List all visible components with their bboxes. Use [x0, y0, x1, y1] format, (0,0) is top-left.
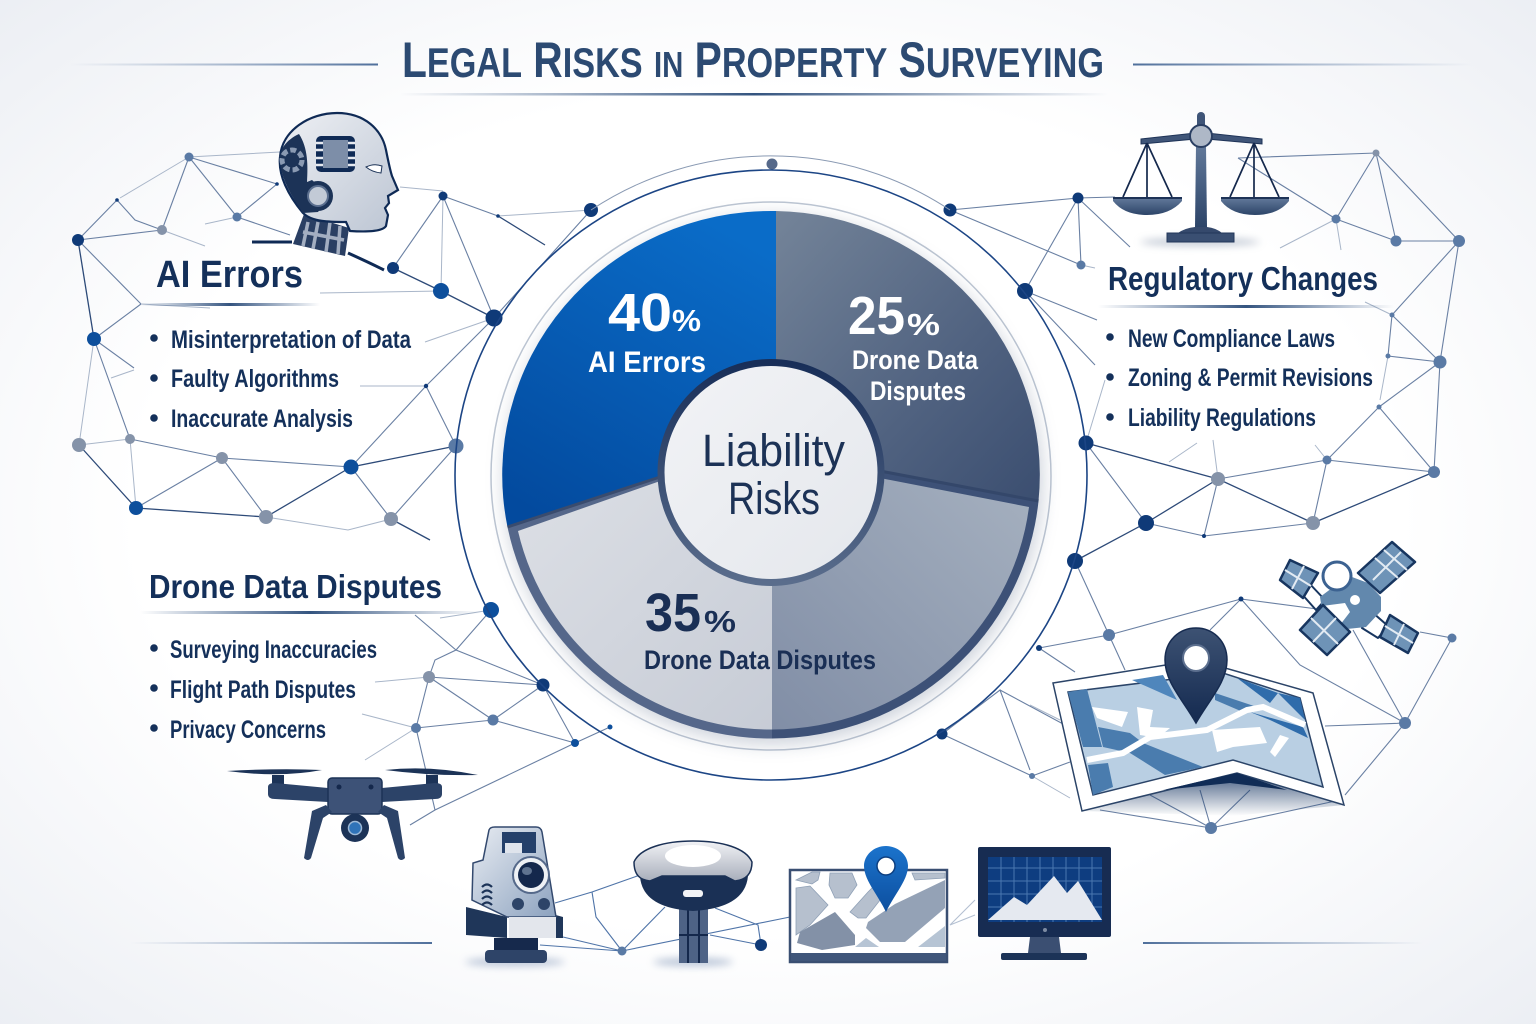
label: 25%: %	[907, 307, 940, 342]
hub label: Liability	[702, 425, 845, 476]
list: Zoning & Permit Revisions	[1128, 364, 1373, 392]
panel: regulatory changes	[1098, 260, 1394, 432]
label: 40%: AI Errors	[588, 346, 706, 379]
segment: 35% Drone Data Disputes, mid	[772, 472, 1038, 738]
network: left lower	[362, 610, 610, 825]
network: right lower	[942, 561, 1452, 828]
title: LEGAL RISKS IN PROPERTY SURVEYING	[402, 32, 1104, 88]
icon: drone	[227, 768, 478, 860]
icon: map tile with pin	[790, 846, 947, 962]
heading: Regulatory Changes	[1108, 260, 1378, 297]
icon: scales	[1113, 112, 1289, 246]
network nodes	[72, 150, 1465, 956]
list	[150, 326, 412, 433]
label: 25%: Disputes	[870, 376, 966, 406]
icon: folded map with pin	[1053, 628, 1344, 816]
label: 35%: Drone Data Disputes	[644, 645, 876, 675]
heading: AI Errors	[156, 254, 303, 296]
label: 35%	[644, 583, 876, 675]
list: Flight Path Disputes	[170, 676, 356, 704]
icon: total station	[465, 827, 565, 966]
heading: Drone Data Disputes	[149, 568, 442, 605]
label: 25%: 25	[848, 286, 905, 346]
list: Liability Regulations	[1128, 404, 1316, 432]
icon: satellite	[1280, 542, 1418, 655]
list: Inaccurate Analysis	[171, 405, 353, 433]
pie chart	[502, 211, 1040, 739]
network: bottom	[540, 875, 975, 951]
list: New Compliance Laws	[1128, 325, 1335, 353]
icon: blue pin	[864, 846, 908, 912]
list: Misinterpretation of Data	[171, 326, 412, 354]
label: 25%: Drone Data	[852, 345, 979, 375]
label: 25%	[848, 286, 979, 406]
list	[150, 636, 377, 744]
pie shadow	[504, 216, 1042, 744]
label: 35%: %	[704, 604, 736, 639]
list: Faulty Algorithms	[171, 365, 339, 393]
centre hub	[661, 362, 881, 582]
concentric rings	[455, 156, 1087, 780]
network: right upper	[950, 153, 1459, 561]
label: 40%: 40	[608, 283, 672, 343]
panel: AI errors	[140, 254, 412, 433]
panel: drone data disputes	[140, 568, 480, 744]
label: 40%	[588, 283, 706, 379]
list: Privacy Concerns	[170, 716, 326, 744]
label: 35%: 35	[645, 583, 701, 643]
label: 40%: %	[672, 303, 701, 338]
segment: 40% AI Errors	[502, 211, 776, 527]
icon: monitor with chart	[978, 847, 1111, 960]
list	[1106, 325, 1373, 432]
segment: 35% Drone Data Disputes, light	[508, 475, 772, 739]
network: left upper	[78, 152, 592, 540]
icon: map pin	[1165, 628, 1227, 723]
centre hub: Risks	[728, 473, 820, 524]
icon: GNSS receiver	[634, 841, 752, 966]
segment: 25% Drone Data Disputes	[776, 211, 1040, 501]
icon: AI head	[252, 113, 398, 270]
list: Surveying Inaccuracies	[170, 636, 377, 664]
